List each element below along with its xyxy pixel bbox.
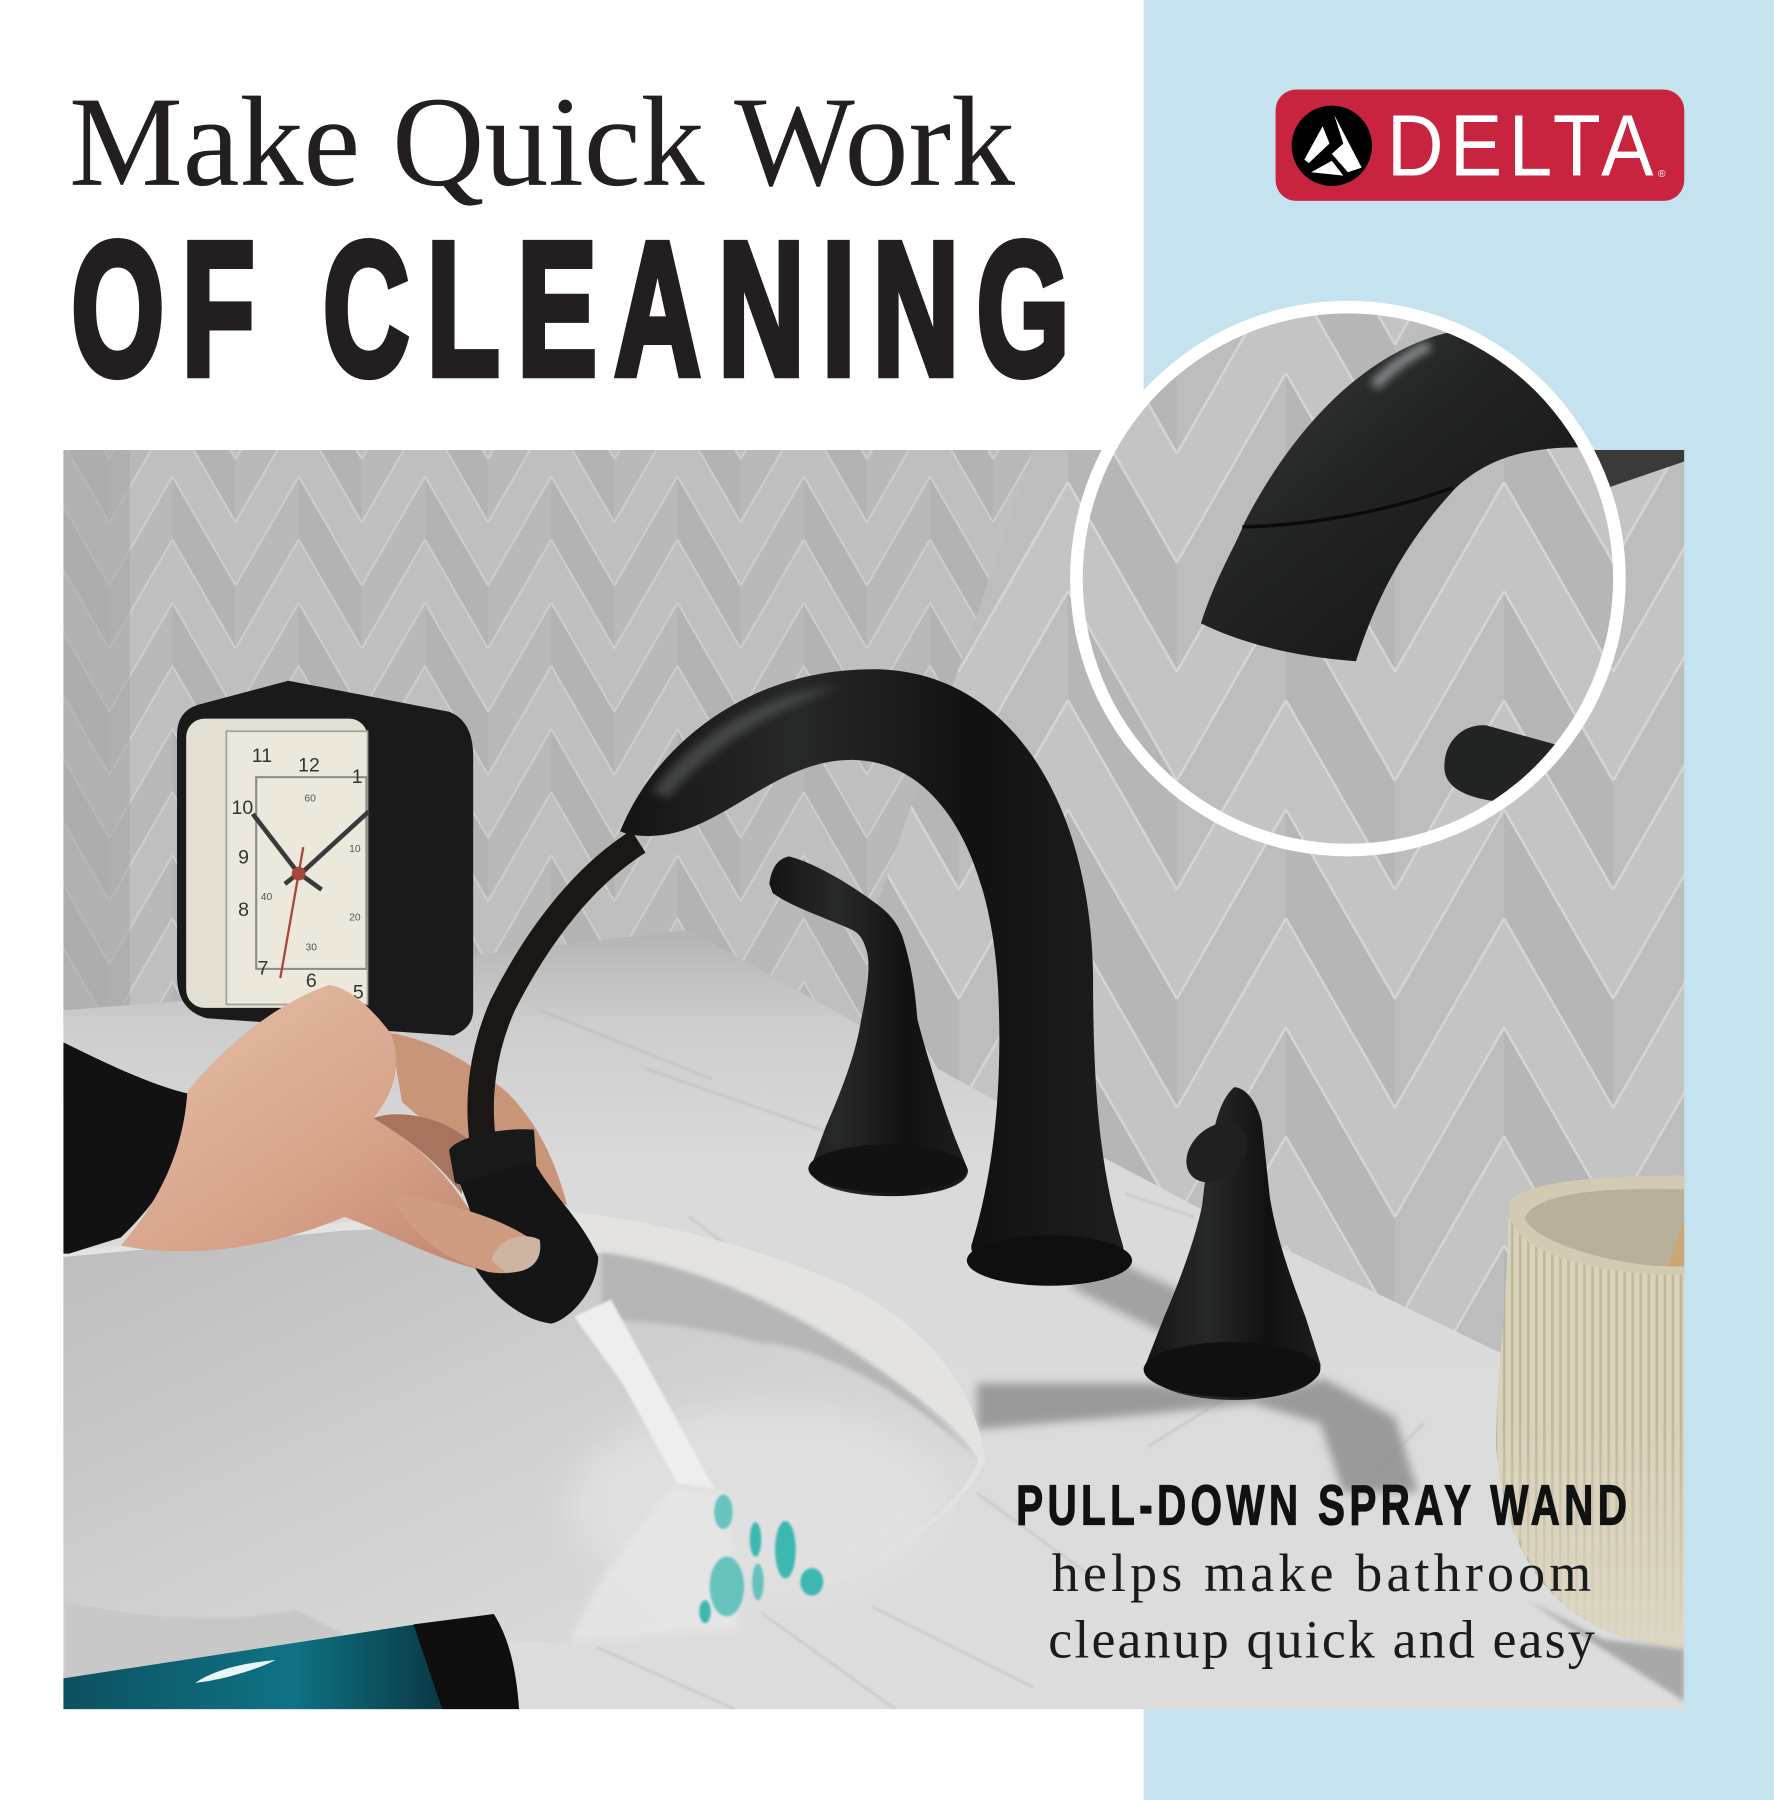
bottle body — [63, 1624, 442, 1709]
left handle lever and cone — [769, 856, 968, 1196]
inset white ring — [1070, 301, 1626, 856]
cup smooth foot — [1503, 1468, 1684, 1650]
spray bottle — [63, 1614, 519, 1709]
clock numerals: 7 — [258, 958, 269, 980]
title line two: OF CLEANING — [71, 203, 1069, 415]
water stream — [574, 1299, 714, 1489]
hose — [481, 841, 638, 1154]
clock hub — [292, 867, 306, 880]
hand — [121, 985, 540, 1272]
clock face — [186, 719, 368, 1008]
clock seconds track — [256, 777, 366, 969]
light blue background panel — [1144, 0, 1774, 1800]
sink basin — [63, 1229, 978, 1643]
logo emblem — [1292, 106, 1372, 186]
inset spout highlight — [1374, 346, 1429, 386]
caption line one: helps make bathroom — [1052, 1543, 1591, 1603]
thumb — [391, 1194, 540, 1273]
spout highlight — [652, 686, 838, 798]
inset contents — [1068, 298, 1630, 861]
clock numerals: 12 — [298, 754, 320, 776]
main faucet spout — [620, 669, 1132, 1286]
tiled wall — [64, 450, 1034, 1026]
basin rim shadow — [602, 1252, 978, 1460]
cup stick — [1667, 1219, 1684, 1272]
clock body — [177, 681, 473, 1035]
clock numerals: 9 — [238, 846, 249, 868]
clock numerals: 6 — [306, 970, 317, 992]
right handle lever — [1175, 1111, 1260, 1194]
right handle cone — [1146, 1087, 1320, 1400]
inset spout seam — [1242, 488, 1452, 527]
right handle base — [1144, 1342, 1320, 1397]
right faucet handle — [1144, 1087, 1320, 1400]
larger wall tiles — [873, 450, 1684, 1483]
clock dial — [226, 731, 368, 1004]
inset handle lever — [1444, 725, 1561, 804]
left handle base — [808, 1145, 967, 1193]
bottle cap — [413, 1614, 519, 1709]
clock minute labels: 60 — [304, 793, 316, 804]
inset wall tiles — [1068, 298, 1630, 861]
clock numerals: 11 — [252, 745, 272, 767]
inset detail circle — [1068, 298, 1630, 861]
cup rim — [1509, 1176, 1684, 1274]
wand collar — [449, 1129, 536, 1186]
fingernail — [492, 1236, 540, 1272]
clock numerals: 10 — [232, 797, 253, 819]
clock hands — [253, 812, 369, 890]
spout body — [620, 669, 1123, 1276]
inset spout — [1201, 333, 1596, 661]
title line one: Make Quick Work — [69, 70, 1016, 213]
caption line two: cleanup quick and easy — [1048, 1610, 1595, 1670]
registered mark: ® — [1658, 169, 1666, 180]
clock minute labels: 10 — [349, 844, 361, 855]
clock numerals — [232, 745, 364, 1004]
marble countertop — [63, 930, 1684, 1709]
clock minute labels: 20 — [349, 913, 361, 924]
countertop veins — [540, 1010, 1424, 1709]
finger crease shadow — [373, 1114, 471, 1194]
left wall return — [63, 450, 130, 1024]
hand holding wand — [63, 985, 567, 1272]
clock numerals: 8 — [238, 899, 249, 921]
sleeve — [63, 1042, 190, 1254]
cup body — [1496, 1217, 1684, 1650]
basin lower highlight — [580, 1414, 906, 1566]
dark mirror corner — [1590, 450, 1684, 488]
logo red badge — [1276, 90, 1684, 201]
faucet shadows on counter — [977, 1379, 1418, 1492]
clock minute labels: 30 — [306, 943, 317, 954]
sink rim — [64, 1212, 985, 1493]
bottle highlight — [195, 1660, 276, 1683]
spray wand — [449, 1129, 598, 1324]
logo wordmark: DELTA — [1387, 97, 1654, 195]
clock minute labels — [261, 793, 361, 954]
alarm clock — [177, 681, 473, 1035]
cup shadow — [1527, 1600, 1684, 1701]
teal soap — [699, 1495, 823, 1623]
cup — [1496, 1176, 1684, 1701]
clock numerals: 1 — [352, 766, 363, 788]
clock numerals: 5 — [353, 982, 364, 1004]
white background panel — [0, 0, 1144, 1800]
spout base — [967, 1235, 1132, 1286]
wand body — [459, 1162, 598, 1324]
handle shadow — [1068, 1263, 1183, 1337]
bathroom photo — [63, 450, 1684, 1709]
cup inside — [1511, 1176, 1684, 1274]
front left counter — [63, 1600, 459, 1709]
caption heading: PULL-DOWN SPRAY WAND — [1016, 1475, 1627, 1537]
clock minute labels: 40 — [261, 892, 273, 903]
Delta logo — [1276, 90, 1684, 201]
caption — [1016, 1475, 1627, 1670]
title — [69, 70, 1069, 415]
clock red second hand — [280, 847, 303, 978]
rear fingers — [391, 1033, 567, 1205]
thumb and nail — [391, 1194, 540, 1273]
left faucet handle — [769, 856, 968, 1196]
water foam — [576, 1555, 736, 1639]
